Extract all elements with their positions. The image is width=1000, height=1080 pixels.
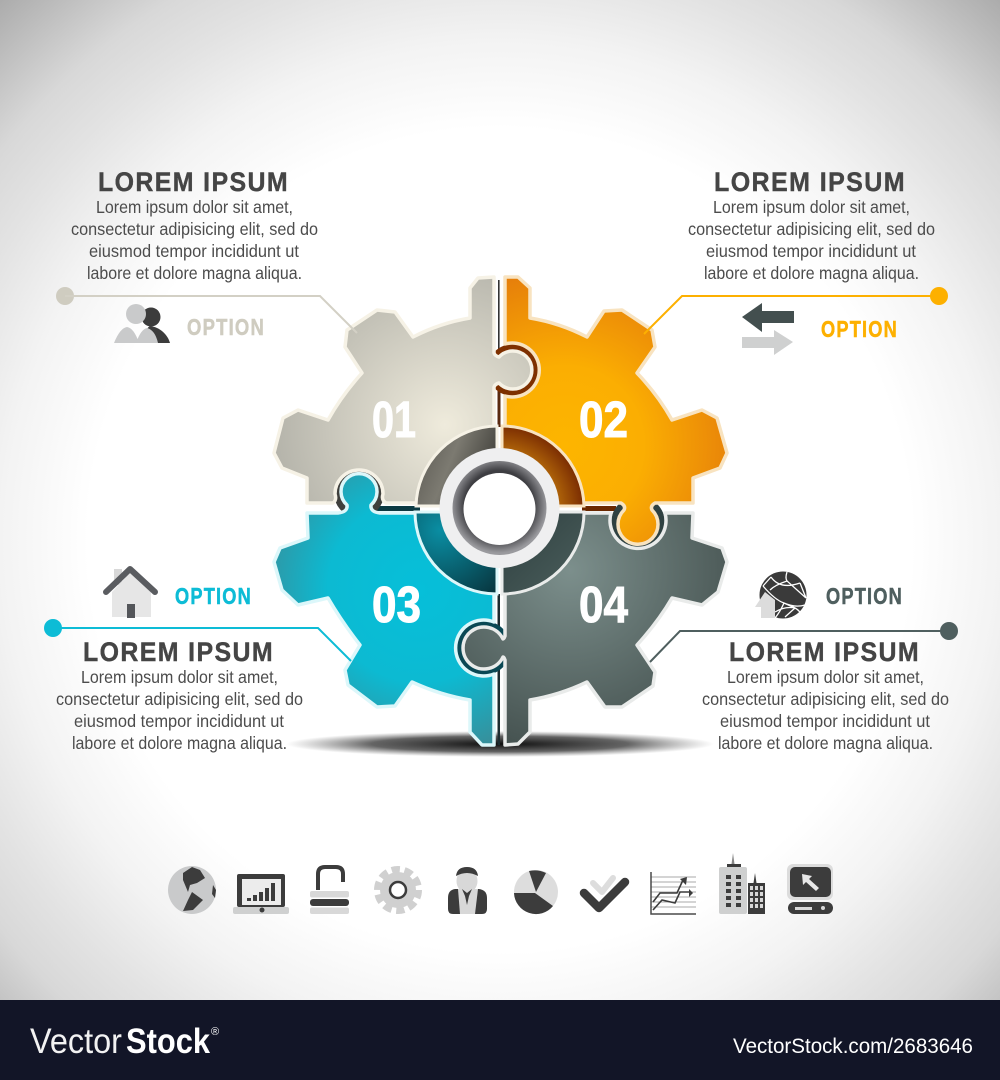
option label four: OPTION bbox=[826, 583, 903, 609]
gear piece 03 bbox=[274, 474, 494, 745]
text block: top left: LOREM IPSUM bbox=[98, 167, 289, 197]
number 01: 01 bbox=[372, 391, 416, 448]
callout line: option two bbox=[644, 287, 948, 334]
text block: bottom right: LOREM IPSUM bbox=[729, 637, 920, 667]
text block: bottom left: labore et dolore magna aliqua. bbox=[72, 733, 287, 753]
footer logo bold part: Stock bbox=[126, 1022, 210, 1061]
number 03: 03 bbox=[372, 576, 421, 633]
gear piece 01 bbox=[274, 277, 532, 503]
text block: bottom left bbox=[56, 637, 303, 753]
footer image id: VectorStock.com/2683646 bbox=[733, 1035, 973, 1058]
icon: laptop with bar chart bbox=[233, 874, 289, 914]
text block: top right: labore et dolore magna aliqua. bbox=[704, 263, 919, 283]
text block: bottom left: consectetur adipisicing elit, sed do bbox=[56, 689, 303, 709]
icon: desktop computer bbox=[787, 864, 833, 914]
footer registered mark: ® bbox=[211, 1026, 219, 1038]
text block: bottom right: consectetur adipisicing elit, sed do bbox=[702, 689, 949, 709]
callout line: option four bbox=[650, 622, 958, 662]
text block: top left: consectetur adipisicing elit, sed do bbox=[71, 219, 318, 239]
option label three: OPTION bbox=[175, 583, 252, 609]
text block: top left: Lorem ipsum dolor sit amet, bbox=[96, 197, 293, 217]
callout line: option three bbox=[44, 619, 351, 661]
central hub bbox=[440, 448, 560, 568]
text block: top right: consectetur adipisicing elit, sed do bbox=[688, 219, 935, 239]
ground shadow bbox=[286, 731, 714, 757]
number 04: 04 bbox=[579, 576, 629, 633]
footer bar bbox=[0, 1000, 1000, 1080]
text block: top left: labore et dolore magna aliqua. bbox=[87, 263, 302, 283]
text block: top right: Lorem ipsum dolor sit amet, bbox=[713, 197, 910, 217]
icon: pie chart bbox=[514, 870, 558, 914]
text block: bottom left: LOREM IPSUM bbox=[83, 637, 274, 667]
gear diagram bbox=[274, 277, 727, 745]
text block: bottom right: labore et dolore magna aliqua. bbox=[718, 733, 933, 753]
gear piece 04 bbox=[463, 513, 727, 745]
inner ring segments bbox=[415, 426, 584, 594]
icon: businessman bbox=[448, 867, 487, 914]
footer logo light part: Vector bbox=[30, 1022, 122, 1061]
text block: bottom left: eiusmod tempor incididunt ut bbox=[74, 711, 284, 731]
icon: arrows bbox=[742, 303, 794, 355]
text block: bottom left: Lorem ipsum dolor sit amet, bbox=[81, 667, 278, 687]
text block: top right bbox=[688, 167, 935, 283]
text block: top right: eiusmod tempor incididunt ut bbox=[706, 241, 916, 261]
icon: network globe and house bbox=[755, 572, 806, 618]
number 02: 02 bbox=[579, 391, 628, 448]
text block: bottom right: eiusmod tempor incididunt ut bbox=[720, 711, 930, 731]
icon: buildings bbox=[719, 853, 765, 914]
option label two: OPTION bbox=[821, 316, 898, 342]
icon: line chart bbox=[651, 872, 696, 914]
icon: globe bbox=[168, 866, 216, 914]
text block: top right: LOREM IPSUM bbox=[714, 167, 906, 197]
gear piece 02 bbox=[505, 277, 727, 544]
icon row bbox=[168, 853, 833, 914]
icon: house bbox=[106, 569, 155, 618]
text block: bottom right: Lorem ipsum dolor sit amet, bbox=[727, 667, 924, 687]
icon: people bbox=[114, 304, 170, 343]
callout line: option one bbox=[56, 287, 357, 333]
text block: bottom right bbox=[702, 637, 949, 753]
option label one: OPTION bbox=[187, 314, 265, 340]
icon: check marks bbox=[584, 878, 625, 908]
icon: open lock bbox=[310, 867, 349, 914]
dark seams behind the pieces bbox=[334, 280, 665, 745]
text block: top left: eiusmod tempor incididunt ut bbox=[89, 241, 299, 261]
text block: top left bbox=[71, 167, 318, 283]
icon: cog bbox=[378, 870, 418, 910]
